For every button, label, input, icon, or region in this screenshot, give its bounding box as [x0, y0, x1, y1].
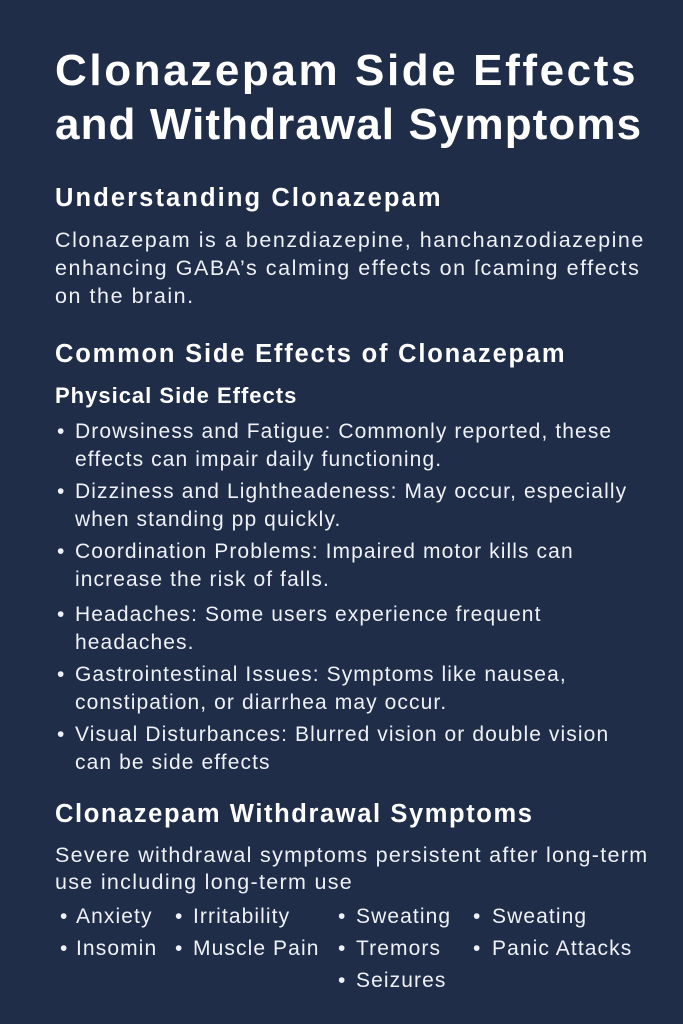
- list: physical side effects: constipation, or diarrhea may occur.: [75, 691, 447, 714]
- list: physical side effects: •: [57, 420, 65, 443]
- list: withdrawal symptoms: •: [338, 905, 346, 928]
- title: [55, 46, 642, 149]
- list: withdrawal symptoms: Muscle Pain: [193, 937, 319, 960]
- list: physical side effects: Coordination Problems: Impaired motor kills can: [75, 540, 574, 563]
- list: withdrawal symptoms: •: [473, 937, 481, 960]
- list: withdrawal symptoms: [60, 905, 632, 992]
- list: physical side effects: effects can impair daily functioning.: [75, 448, 442, 471]
- title: Clonazepam Side Effects: [55, 46, 638, 95]
- list: withdrawal symptoms: •: [175, 905, 183, 928]
- list: withdrawal symptoms: Sweating: [356, 905, 451, 928]
- list: withdrawal symptoms: Seizures: [356, 969, 447, 992]
- list: physical side effects: Headaches: Some users experience frequent: [75, 603, 542, 626]
- heading: common side effects: Common Side Effects of Clonazepam: [55, 340, 566, 368]
- list: physical side effects: •: [57, 723, 65, 746]
- list: withdrawal symptoms: •: [338, 937, 346, 960]
- text block: understanding: enhancing GABA’s calming effects on ſcaming effects: [55, 256, 640, 280]
- subheading: physical: Physical Side Effects: [55, 383, 297, 408]
- list: withdrawal symptoms: Insomin: [76, 937, 157, 960]
- list: withdrawal symptoms: Anxiety: [76, 905, 153, 928]
- list: withdrawal symptoms: Panic Attacks: [492, 937, 632, 960]
- text block: understanding: on the brain.: [55, 284, 195, 308]
- list: withdrawal symptoms: Irritability: [193, 905, 290, 928]
- list: physical side effects: •: [57, 540, 65, 563]
- list: physical side effects: when standing pp quickly.: [75, 508, 341, 531]
- list: physical side effects: •: [57, 603, 65, 626]
- heading: withdrawal: Clonazepam Withdrawal Symptoms: [55, 800, 534, 828]
- list: withdrawal symptoms: •: [60, 937, 68, 960]
- list: withdrawal symptoms: Tremors: [356, 937, 441, 960]
- list: physical side effects: •: [57, 480, 65, 503]
- list: physical side effects: can be side effects: [75, 751, 271, 774]
- list: physical side effects: •: [57, 663, 65, 686]
- list: physical side effects: Gastrointestinal Issues: Symptoms like nausea,: [75, 663, 567, 686]
- list: withdrawal symptoms: •: [60, 905, 68, 928]
- list: physical side effects: Visual Disturbances: Blurred vision or double vision: [75, 723, 609, 746]
- heading: understanding: Understanding Clonazepam: [55, 184, 443, 212]
- title: and Withdrawal Symptoms: [55, 100, 642, 149]
- list: withdrawal symptoms: •: [338, 969, 346, 992]
- text block: withdrawal: [55, 843, 648, 894]
- list: physical side effects: increase the risk of falls.: [75, 568, 330, 591]
- list: withdrawal symptoms: •: [175, 937, 183, 960]
- text block: understanding: Clonazepam is a benzdiazepine, hanchanzodiazepine: [55, 228, 645, 252]
- list: physical side effects: Drowsiness and Fatigue: Commonly reported, these: [75, 420, 612, 443]
- list: withdrawal symptoms: •: [473, 905, 481, 928]
- list: physical side effects: headaches.: [75, 631, 195, 654]
- text block: withdrawal: Severe withdrawal symptoms persistent after long-term: [55, 843, 648, 867]
- list: physical side effects: Dizziness and Lightheadeness: May occur, especially: [75, 480, 627, 503]
- text block: withdrawal: use including long-term use: [55, 870, 353, 894]
- list: physical side effects: [57, 420, 627, 774]
- text block: understanding: [55, 228, 645, 308]
- list: withdrawal symptoms: Sweating: [492, 905, 587, 928]
